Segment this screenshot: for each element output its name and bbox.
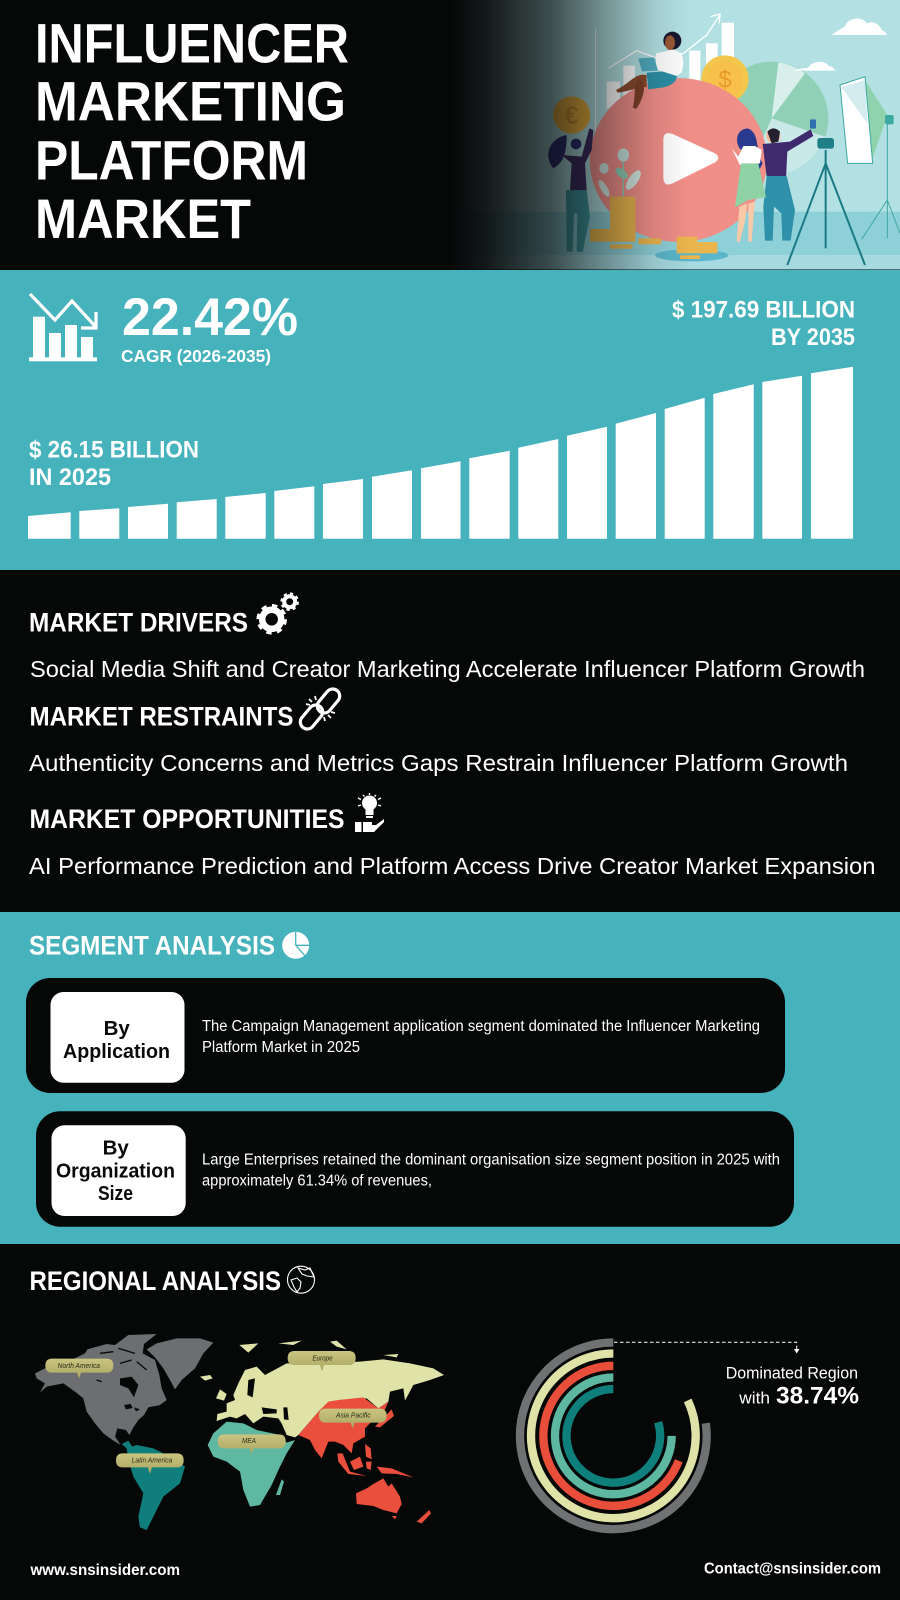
- callout: Asia Pacific: [319, 1409, 387, 1429]
- CAGR label: CAGR (2026-2035): [121, 346, 271, 366]
- label box: by organization size: Organization: [56, 1160, 175, 1183]
- text: drivers: Social Media Shift and Creator Marketing Accelerate Influencer Platform Growth: [30, 656, 865, 682]
- text: opportunities: AI Performance Prediction and Platform Access Drive Creator Market Expansion: [29, 853, 876, 879]
- header illustration: [450, 0, 900, 270]
- 2025 value: [29, 437, 199, 491]
- dollar coin: $: [718, 66, 732, 93]
- seated woman with laptop: [616, 32, 683, 109]
- cloud: large: [832, 19, 887, 35]
- 2025 value: $ 26.15 BILLION: [29, 437, 199, 464]
- couple: woman: [732, 128, 766, 242]
- text: restraints: Authenticity Concerns and Metrics Gaps Restrain Influencer Platform Growth: [29, 750, 848, 776]
- label box: by application: [50, 992, 184, 1083]
- icon: globe: [288, 1266, 314, 1293]
- callout: Europe: [288, 1351, 356, 1372]
- title: INFLUENCER: [35, 12, 349, 75]
- panel: header: [35, 0, 900, 270]
- callout: Latin America: Latin America: [132, 1458, 172, 1465]
- footer: [30, 1560, 881, 1579]
- text: application: Platform Market in 2025: [202, 1039, 360, 1056]
- euro coin: €: [565, 102, 579, 130]
- callout: Europe: Europe: [312, 1355, 333, 1362]
- world map: [35, 1334, 444, 1530]
- radial bar chart: [520, 1342, 707, 1529]
- panel: drivers, restraints, opportunities: [29, 594, 876, 879]
- label box: by organization size: Size: [98, 1182, 133, 1205]
- left woman holding euro: [548, 128, 593, 252]
- rising bars and arrow: [596, 14, 734, 133]
- dashed leader arrow: [614, 1342, 800, 1354]
- 2035 value: [672, 297, 855, 351]
- label box: by application: By: [104, 1017, 130, 1040]
- 2035 value: $ 197.69 BILLION: [672, 297, 855, 324]
- gradient fade into black: [450, 0, 690, 270]
- region: Europe and Russia: [200, 1341, 444, 1437]
- title: MARKETING: [35, 70, 346, 133]
- pie background: [715, 62, 828, 175]
- callout: North America: North America: [58, 1363, 100, 1370]
- coin stacks: [590, 197, 728, 261]
- icon: declining chart: [29, 294, 97, 361]
- contact email: Contact@snsinsider.com: [704, 1560, 881, 1577]
- dominated region callout: [726, 1363, 859, 1409]
- cloud: small: [793, 62, 835, 71]
- heading: market opportunities: MARKET OPPORTUNITIES: [30, 804, 344, 834]
- callout: Latin America: [116, 1453, 184, 1474]
- title: PLATFORM: [35, 128, 308, 191]
- text: organization size: approximately 61.34% of revenues,: [202, 1172, 432, 1189]
- label box: by application: Application: [63, 1040, 170, 1063]
- dominated region callout: Dominated Region: [726, 1363, 858, 1382]
- panel: market size: [0, 270, 900, 570]
- heading: market drivers: MARKET DRIVERS: [29, 608, 248, 638]
- couple: man: [763, 119, 816, 241]
- card: by organization size: [36, 1111, 794, 1227]
- icon: gears: [258, 594, 298, 633]
- card: by application: [26, 978, 785, 1093]
- website: www.snsinsider.com: [30, 1562, 180, 1579]
- plant: [596, 148, 644, 198]
- text: organization size: [202, 1151, 780, 1189]
- text: application: [202, 1018, 760, 1056]
- softbox light: [840, 77, 900, 239]
- play triangle: [663, 133, 718, 184]
- red play circle: [590, 78, 767, 242]
- CAGR value: 22.42%: [122, 288, 298, 347]
- region: North America: [35, 1334, 213, 1445]
- text: organization size: Large Enterprises retained the dominant organisation size segment position in 2025 with: [202, 1151, 780, 1168]
- camera on tripod: [787, 138, 865, 265]
- panel: segment analysis: [0, 912, 900, 1244]
- icon: broken link: [297, 686, 343, 732]
- label box: by organization size: By: [103, 1136, 129, 1159]
- icon: pie chart: [282, 931, 310, 959]
- callout: North America: [45, 1359, 113, 1379]
- panel: regional analysis: [30, 1266, 859, 1530]
- region: Latin America: [122, 1441, 185, 1530]
- dollar coin: [701, 55, 749, 103]
- region: Middle East and Africa: [208, 1422, 295, 1507]
- title: MARKET: [35, 187, 251, 250]
- text: application: The Campaign Management application segment dominated the Influencer Marketing: [202, 1018, 760, 1035]
- heading: regional analysis: REGIONAL ANALYSIS: [30, 1266, 281, 1296]
- callout: MEA: [218, 1434, 286, 1455]
- 2035 value: BY 2035: [771, 324, 855, 351]
- callout: Asia Pacific: Asia Pacific: [335, 1413, 371, 1420]
- bar chart: [28, 367, 853, 539]
- heading: segment analysis: SEGMENT ANALYSIS: [29, 930, 275, 960]
- label box: by organization size: [52, 1125, 186, 1216]
- 2025 value: IN 2025: [29, 464, 111, 491]
- callout: MEA: MEA: [242, 1438, 256, 1445]
- euro coin: [553, 96, 590, 134]
- dominated region callout: with: [738, 1388, 770, 1407]
- icon: bulb in hand: [355, 793, 384, 832]
- dominated region callout: 38.74%: [776, 1382, 859, 1409]
- heading: market restraints: MARKET RESTRAINTS: [30, 702, 294, 732]
- region: Asia Pacific: [298, 1397, 431, 1523]
- title: [35, 12, 349, 250]
